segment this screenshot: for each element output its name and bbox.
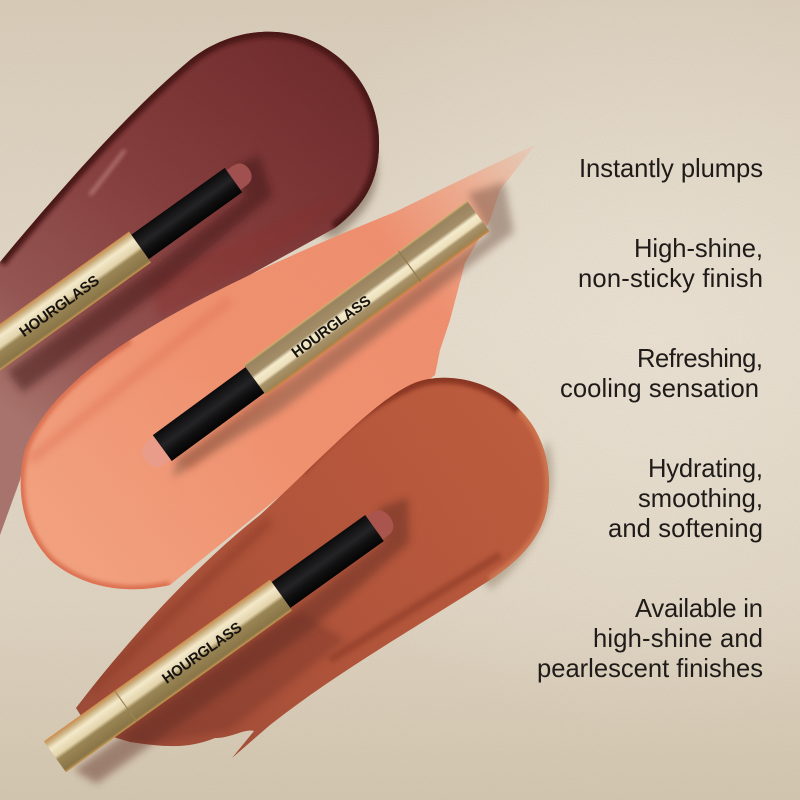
benefit: hydrating: Hydrating, [648, 455, 763, 483]
benefit: finish: non-sticky finish [578, 265, 763, 293]
swatch: terracotta smear [70, 370, 560, 760]
gold tube [244, 201, 489, 395]
shadow [140, 172, 535, 486]
benefit: hydrating [608, 455, 763, 543]
lipstick 3: terracotta shade [44, 486, 438, 794]
black barrel [153, 367, 264, 461]
lipstick 1: burgundy shade [0, 144, 291, 404]
bullet tip [364, 506, 398, 541]
swatch: coral smear [0, 140, 540, 600]
gold tube [0, 232, 151, 379]
bullet tip [224, 159, 256, 192]
lipstick 2: coral shade [131, 172, 535, 493]
benefit: plumps: Instantly plumps [579, 155, 763, 183]
shadow [53, 490, 438, 790]
benefit: hydrating: and softening [608, 515, 763, 543]
benefit: cooling [560, 345, 763, 403]
brand: HOURGLASS [16, 272, 103, 341]
benefit: available finishes: pearlescent finishes [537, 655, 763, 683]
benefit: available finishes [537, 595, 763, 683]
brand: HOURGLASS [289, 292, 374, 362]
black barrel [131, 168, 242, 259]
benefit: available finishes: Available in [635, 595, 763, 623]
benefit: finish: High-shine, [634, 235, 763, 263]
benefit: finish [578, 235, 763, 293]
black barrel [272, 515, 384, 608]
benefit: cooling: Refreshing, [637, 345, 763, 373]
bullet tip [137, 435, 173, 472]
shadow [0, 152, 291, 392]
benefit: available finishes: high-shine and [593, 625, 763, 653]
swatch: dark burgundy smear [0, 32, 382, 535]
benefit: hydrating: smoothing, [638, 485, 763, 513]
benefit: cooling: cooling sensation [560, 375, 759, 403]
gold tube [44, 580, 292, 772]
brand: HOURGLASS [159, 619, 245, 688]
